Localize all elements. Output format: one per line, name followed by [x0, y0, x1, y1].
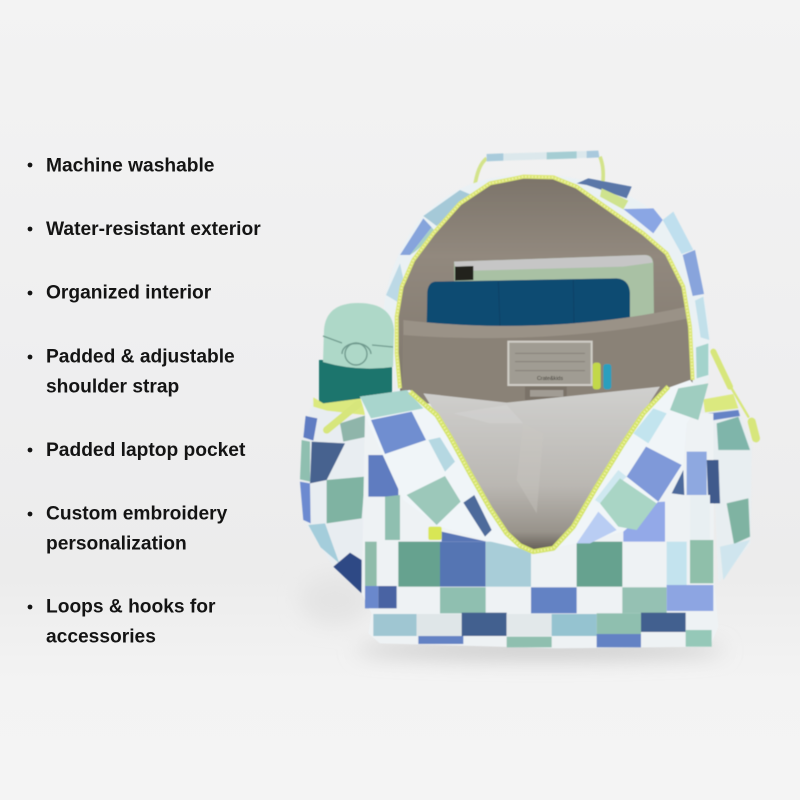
- upper backpack: [383, 151, 710, 403]
- feature: water-resistant exterior: Water-resistant exterior: [46, 219, 261, 240]
- feature: custom embroidery: personalization: [46, 534, 187, 554]
- floor shadow: [300, 575, 725, 658]
- feature: custom embroidery: Custom embroidery: [46, 504, 228, 524]
- right flap: [533, 380, 708, 552]
- flap zipper: [410, 387, 668, 552]
- left side pocket: [300, 400, 368, 593]
- check row 1: [365, 540, 713, 587]
- bottle lid: [323, 303, 394, 369]
- feature: padded shoulder strap: Padded & adjustable: [46, 346, 235, 368]
- name label: Crate&kids: [537, 376, 563, 382]
- interior lining: [397, 177, 693, 403]
- interior lid: [423, 387, 660, 552]
- interior pocket: [402, 307, 692, 403]
- handle: [474, 151, 603, 188]
- feature: padded laptop pocket: Padded laptop pocket: [46, 440, 246, 461]
- feature: loops and hooks: Loops & hooks for: [46, 596, 216, 618]
- main zipper: [397, 177, 693, 388]
- right zipper pull: [713, 352, 756, 438]
- feature: machine washable: Machine washable: [46, 156, 215, 176]
- right elastic band: [703, 394, 738, 412]
- left zipper pull: [327, 404, 358, 430]
- water bottle: [319, 303, 394, 405]
- front panel: [360, 380, 719, 648]
- name label: [508, 342, 592, 400]
- zipper pull tag: [428, 527, 442, 540]
- side pocket elastics: [313, 352, 756, 438]
- left elastic band: [313, 397, 365, 415]
- check row 2: [365, 585, 713, 613]
- check row 3: [373, 613, 686, 636]
- backpack illustration: [300, 151, 756, 648]
- feature list: [28, 156, 261, 648]
- left flap: [360, 390, 533, 552]
- back panel: [383, 175, 710, 393]
- feature: loops and hooks: [28, 596, 216, 648]
- bottle lid clasp: [342, 343, 371, 365]
- feature: custom embroidery: [28, 504, 228, 554]
- upper check row: [368, 452, 719, 542]
- pens: [593, 363, 611, 389]
- feature: organized interior: Organized interior: [46, 282, 212, 304]
- right side pocket: [702, 408, 752, 583]
- feature: padded shoulder strap: shoulder strap: [46, 376, 179, 398]
- feature: padded shoulder strap: [28, 346, 235, 398]
- notebook: [454, 255, 654, 320]
- feature: loops and hooks: accessories: [46, 626, 156, 648]
- check row 4: [418, 630, 712, 647]
- tablet case: [427, 278, 630, 327]
- bottle body: [319, 360, 392, 405]
